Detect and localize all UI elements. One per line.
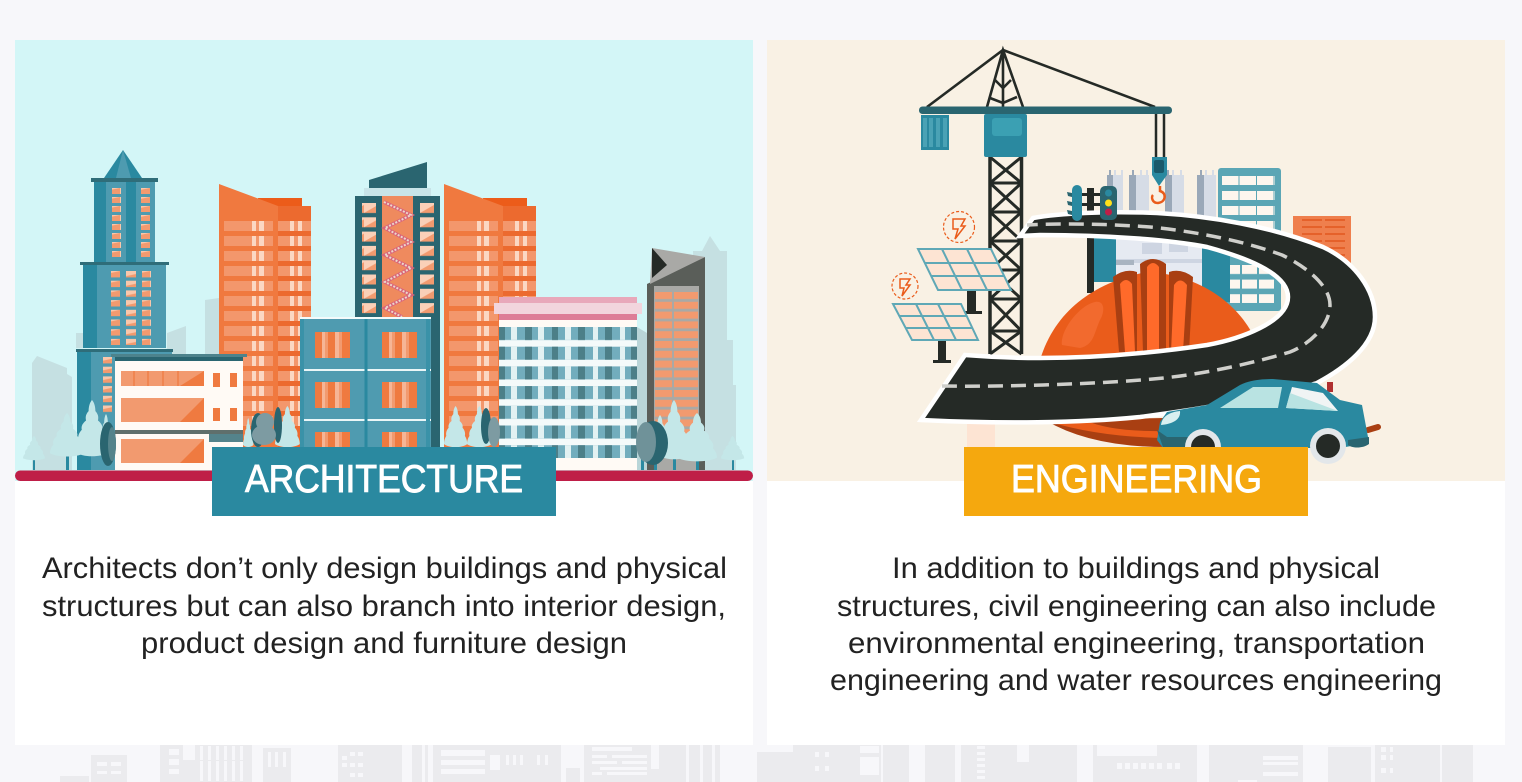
heading: architecture [212,447,556,516]
text: engineering description: structures, civil engineering can also include [837,590,1436,623]
text: engineering description: engineering and water resources engineering [830,664,1442,697]
text: architecture description: product design and furniture design [141,627,627,660]
icon: energy bolt lower [892,273,918,299]
building: dark teal tower [355,162,440,470]
building: pink-roof hotel [494,297,642,470]
car rear wheel [1310,428,1346,464]
trees and bushes [23,400,744,470]
engineering illustration background [767,40,1505,481]
text: engineering description: environmental engineering, transportation [848,627,1425,660]
architecture illustration background [15,40,753,481]
peach column [967,423,995,449]
building: white low-rise [111,354,247,470]
crane cabin [984,114,1027,157]
solar panel upper [918,249,1011,290]
building: orange tower right [444,184,536,470]
traffic signs [1067,185,1117,221]
text: architecture description: Architects don’t only design buildings and physical [42,552,727,585]
text: engineering description [830,552,1442,697]
panel: engineering [767,40,1505,745]
heading: engineering [964,447,1308,516]
car front wheel [1185,429,1221,465]
panel: architecture [15,40,753,745]
bush right [481,408,668,465]
car [1157,379,1378,465]
heading: architecture: ARCHITECTURE [245,458,523,501]
crane top cables [927,50,1155,107]
solar panels [892,212,1011,363]
text: engineering description: In addition to buildings and physical [892,552,1380,585]
crane container [921,115,949,150]
bottom skyline silhouette [60,745,1473,782]
building: orange tower left [219,184,311,470]
ghost skyline [32,188,736,470]
text: architecture description: structures but can also branch into interior design, [42,590,726,623]
road [921,212,1375,422]
crane hook [1152,114,1167,203]
crane [919,50,1172,354]
building: teal clock tower [76,150,173,470]
background city blocks [1094,168,1351,392]
heading: engineering: ENGINEERING [1011,458,1262,501]
text: architecture description [42,552,727,660]
crane jib [919,106,1172,114]
hat brim [1045,418,1165,447]
building: grey angular tower [647,248,705,470]
bush centre [251,407,282,447]
hard hat [1040,259,1253,447]
hat ribs [1113,259,1193,352]
ground strip [15,470,753,481]
building: blue block [300,317,431,470]
icon: energy bolt upper [944,212,974,242]
solar panel lower [893,304,978,340]
bush left [100,422,116,466]
traffic light pole [1075,188,1107,293]
crane tower lattice [990,157,1022,354]
